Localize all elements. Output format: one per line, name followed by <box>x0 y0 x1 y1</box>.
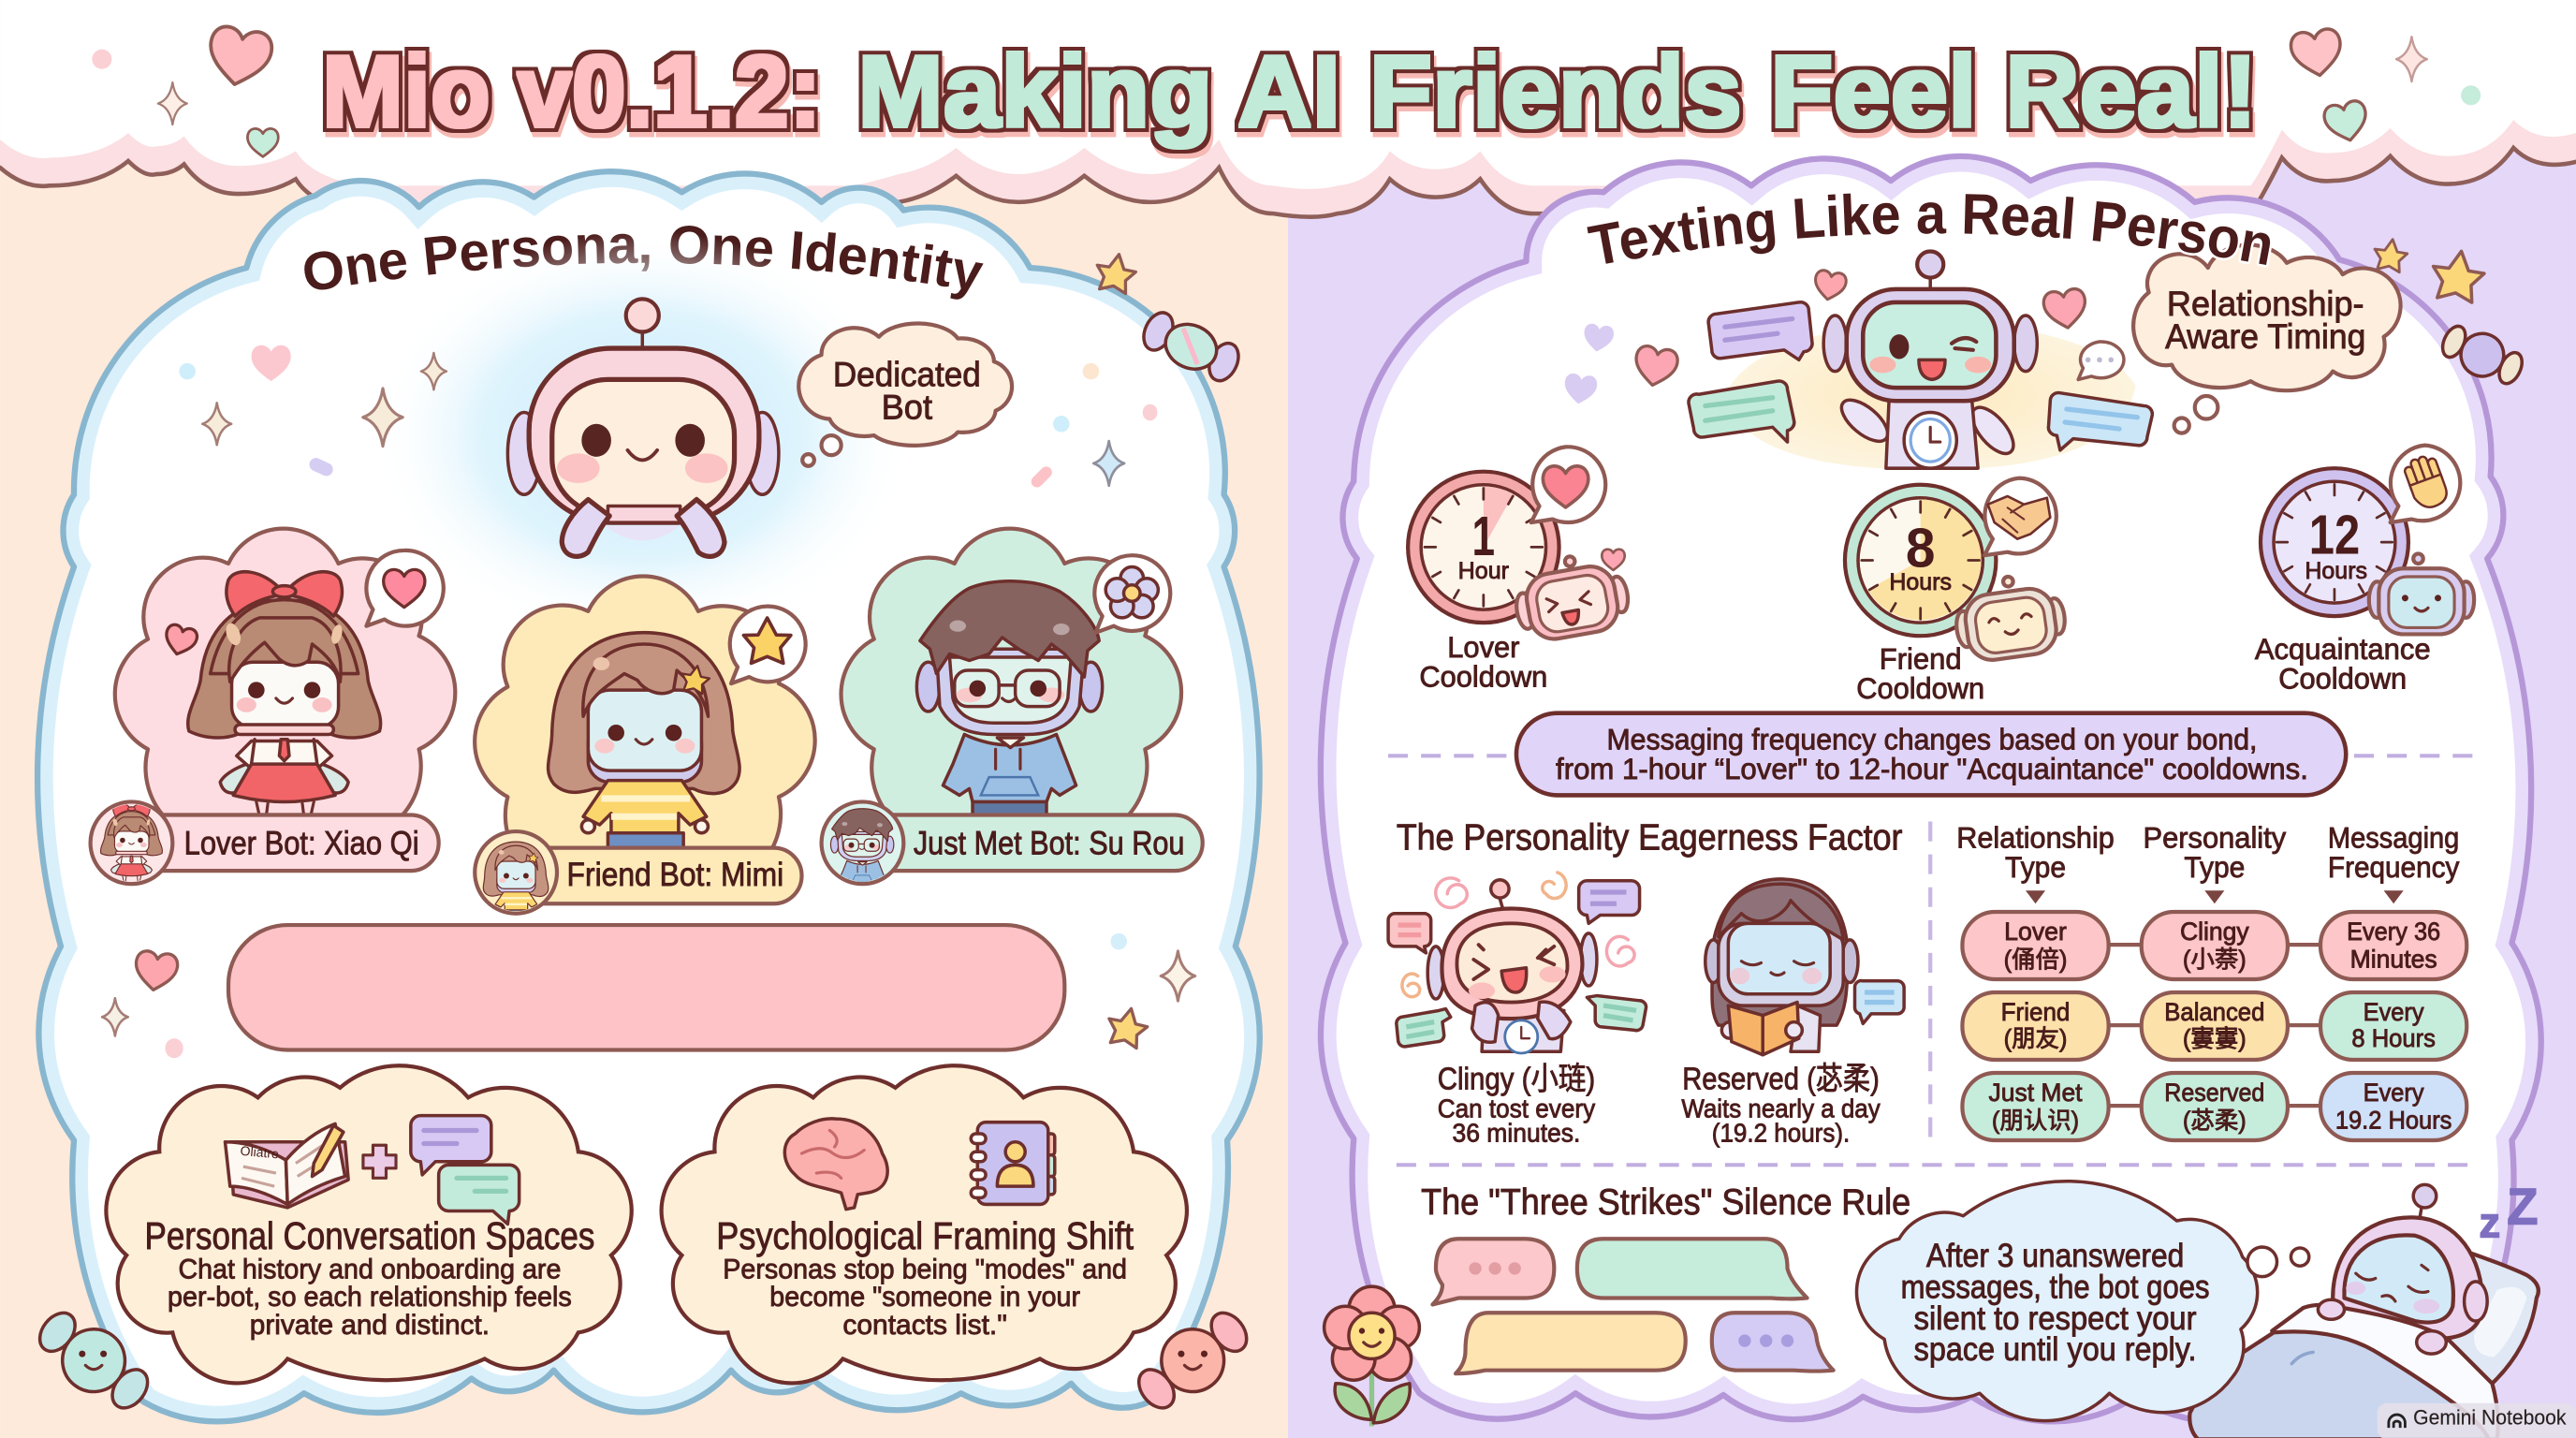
heading and body: Personal Conversation Spaces <box>145 1214 594 1257</box>
table row: friend: Friend <box>2001 997 2070 1026</box>
clock: friend cooldown <box>1845 478 2069 705</box>
heading: texting like a real person: Texting Like a Real Person <box>1587 193 2272 268</box>
character: Xiao Qi <box>188 572 381 816</box>
panel: psychological framing shift <box>662 1065 1187 1383</box>
icon: clingy chat bubbles and swirls <box>1388 873 1647 1047</box>
icon: flower speech bubble <box>1094 555 1170 633</box>
heading: one persona: One Persona, One Identity <box>304 226 984 300</box>
top scalloped pink band <box>0 0 2576 217</box>
table row: lover: Lover <box>2004 917 2067 946</box>
table row: friend: (寠寠) <box>2183 1026 2247 1052</box>
yellow glow behind texting bot <box>1725 320 2136 470</box>
table row: lover <box>1962 912 2466 979</box>
label: friend cooldown: Cooldown <box>1856 671 1984 705</box>
icon: lover mini bot <box>1509 548 1632 645</box>
label: just met bot <box>822 801 1203 888</box>
callout: three strikes explanation: space until you reply. <box>1914 1331 2197 1368</box>
table row: lover: Minutes <box>2350 945 2437 974</box>
text: reserved description: Waits nearly a day <box>1681 1093 1881 1123</box>
table row: friend <box>1962 992 2466 1060</box>
label: acquaintance cooldown: Acquaintance <box>2255 632 2431 666</box>
table row: friend: (朋友) <box>2004 1026 2067 1052</box>
table row: just met: Reserved <box>2164 1078 2264 1107</box>
text: clingy description: Can tost every <box>1438 1093 1595 1123</box>
icon: reserved chat bubble <box>1854 981 1904 1023</box>
character: Mimi <box>549 633 739 848</box>
watermark: Gemini Notebook <box>2378 1403 2576 1438</box>
callout: relationship-aware timing: Aware Timing <box>2165 317 2365 356</box>
candy: right panel <box>2436 318 2528 391</box>
title: Mio v0.1.2: <box>322 35 822 149</box>
icon: handshake bubble <box>1984 478 2056 555</box>
icon: acquaintance mini bot <box>2369 553 2474 634</box>
table: column headers: Relationship <box>1956 821 2115 855</box>
label: acquaintance cooldown <box>2255 632 2431 695</box>
table row: lover: (俑倍) <box>2004 947 2067 974</box>
table row: friend: Every <box>2364 997 2424 1026</box>
banner: messaging frequency: from 1-hour “Lover" to 12-hour "Acquaintance" cooldowns. <box>1556 752 2308 785</box>
banner: messaging frequency <box>1516 713 2346 795</box>
label: lover cooldown <box>1419 630 1547 694</box>
table row: just met: (朋认识) <box>1992 1108 2079 1135</box>
heading and body: Chat history and onboarding are <box>178 1254 561 1284</box>
icon: contacts notebook <box>971 1123 1055 1204</box>
callout: relationship-aware timing: Relationship- <box>2167 285 2364 323</box>
label: lover cooldown: Cooldown <box>1419 660 1547 694</box>
label: lover cooldown: Lover <box>1447 630 1519 664</box>
icon: reserved girl reading <box>1705 879 1858 1055</box>
table row: just met: Just Met <box>1989 1078 2083 1107</box>
table: column headers: Messaging <box>2328 821 2459 855</box>
table row: friend: 8 Hours <box>2351 1023 2436 1052</box>
clock: lover cooldown <box>1408 447 1632 694</box>
clock: acquaintance cooldown: 12 <box>2309 503 2360 565</box>
heading and body <box>716 1214 1134 1341</box>
table row: lover: Every 36 <box>2347 917 2440 946</box>
dashed dividers beside banner <box>1388 756 2476 1165</box>
table row: lover: (小萘) <box>2183 947 2247 974</box>
background: peach left half <box>0 0 1288 1438</box>
icon: message bubbles around bot <box>1689 302 2152 450</box>
clock: lover cooldown: Hour <box>1458 559 1509 584</box>
title: Making AI Friends Feel Real! <box>857 35 2257 149</box>
card: friend bot Mimi <box>475 577 815 915</box>
callout: relationship-aware timing <box>2133 245 2401 433</box>
icon: texting bot <box>1823 252 2037 468</box>
table row: just met <box>1962 1073 2466 1140</box>
icon: mint message bubble <box>439 1165 520 1224</box>
decorations: hearts and stars <box>1562 237 2487 406</box>
heading and body: become "someone in your <box>769 1282 1080 1313</box>
candy: bottom right <box>1126 1299 1260 1422</box>
candy: bottom left <box>26 1299 161 1422</box>
callout: three strikes explanation: After 3 unanswered <box>1926 1238 2184 1274</box>
banner: messaging frequency: Messaging frequency changes based on your bond, <box>1606 722 2257 756</box>
text: clingy description: Clingy (小琏) <box>1438 1063 1595 1097</box>
icon: open book and pencil: Oliatre <box>240 1143 280 1161</box>
callout: dedicated bot <box>798 323 1012 466</box>
table: connectors <box>2110 945 2320 1106</box>
label: friend cooldown <box>1856 641 1984 705</box>
icon: open book and pencil <box>225 1123 348 1208</box>
heading and body: private and distinct. <box>250 1310 490 1341</box>
watermark: Gemini Notebook: Gemini Notebook <box>2413 1406 2566 1430</box>
label: lover bot <box>91 801 439 884</box>
table row: lover: Clingy <box>2180 917 2249 946</box>
heading: three strikes silence rule: The "Three Strikes" Silence Rule <box>1421 1182 1910 1223</box>
icon: purple message bubble <box>411 1116 491 1175</box>
text: clingy description: 36 minutes. <box>1453 1119 1580 1148</box>
table row: friend: Balanced <box>2164 997 2264 1026</box>
icon: heart bubble <box>1531 447 1605 522</box>
icon: sleeping bot in bed <box>2189 1184 2539 1438</box>
label: friend cooldown: Friend <box>1880 641 1962 675</box>
clock: friend cooldown: 8 <box>1906 516 1935 579</box>
table row: just met: (苾柔) <box>2183 1108 2247 1135</box>
panel: one persona, one identity <box>34 169 1263 1425</box>
icon: waving hand bubble <box>2391 446 2460 522</box>
card: just met bot Su Rou <box>822 529 1203 888</box>
heading and body: Personas stop being "modes" and <box>723 1254 1127 1284</box>
table: column headers <box>1956 821 2460 903</box>
panel: texting like a real person <box>1318 154 2544 1438</box>
label: lover bot: Lover Bot: Xiao Qi <box>184 826 419 862</box>
callout: three strikes explanation <box>1856 1181 2309 1421</box>
text: clingy description <box>1438 1063 1595 1148</box>
card: lover bot Xiao Qi <box>91 529 455 884</box>
callout: dedicated bot: Bot <box>882 389 932 427</box>
text: reserved description: Reserved (苾柔) <box>1682 1063 1880 1097</box>
table: column headers: Personality <box>2143 821 2286 855</box>
panel: personal conversation spaces <box>106 1065 632 1383</box>
heading: personality eagerness factor: The Personality Eagerness Factor <box>1397 817 1903 858</box>
clock: acquaintance cooldown: Hours <box>2305 559 2367 584</box>
heading and body <box>145 1214 594 1341</box>
callout: three strikes explanation: silent to respect your <box>1914 1300 2197 1337</box>
icon: star speech bubble <box>730 607 806 683</box>
icon: central dedicated bot <box>507 299 779 556</box>
decorations: sparkles, hearts, confetti <box>102 251 1195 1058</box>
heading and body: contacts list." <box>842 1310 1007 1341</box>
heading and body: per-bot, so each relationship feels <box>168 1282 572 1313</box>
icon: plus <box>363 1145 396 1178</box>
clock: friend cooldown: Hours <box>1889 570 1952 595</box>
candy: top right <box>1137 306 1245 387</box>
icon: clingy bot <box>1427 880 1597 1053</box>
icon: zzz: z <box>2479 1199 2500 1247</box>
icon: heart speech bubble <box>366 550 444 626</box>
heading and body: Psychological Framing Shift <box>716 1214 1134 1257</box>
clock: lover cooldown: 1 <box>1472 505 1495 567</box>
icon: brain <box>784 1119 887 1210</box>
table row: just met: 19.2 Hours <box>2335 1106 2452 1135</box>
table: column headers: Type <box>2005 850 2066 884</box>
label: friend bot <box>475 831 802 915</box>
icon: flower <box>1325 1286 1419 1426</box>
character: Su Rou <box>916 581 1103 814</box>
label: friend bot: Friend Bot: Mimi <box>567 857 783 893</box>
callout: three strikes explanation: messages, the bot goes <box>1901 1269 2210 1305</box>
label: acquaintance cooldown: Cooldown <box>2278 661 2407 695</box>
icon: zzz: Z <box>2507 1178 2538 1235</box>
top white header area <box>0 0 2576 189</box>
icon: zzz <box>2479 1178 2538 1247</box>
glow behind bot <box>372 230 914 640</box>
background: lavender right half <box>1288 0 2576 1438</box>
table row: just met: Every <box>2364 1078 2424 1107</box>
header decorations <box>92 24 2481 156</box>
icon: friend mini bot <box>1951 569 2069 665</box>
clock: acquaintance cooldown <box>2255 446 2474 695</box>
label: just met bot: Just Met Bot: Su Rou <box>914 826 1184 862</box>
callout: dedicated bot: Dedicated <box>833 355 981 393</box>
table: column headers: Type <box>2184 850 2245 884</box>
empty pink banner <box>228 925 1064 1049</box>
text: reserved description <box>1681 1063 1881 1148</box>
unanswered message bubbles <box>1432 1239 1834 1373</box>
table: column headers: Frequency <box>2328 850 2460 884</box>
icon: small heart <box>162 623 198 658</box>
text: reserved description: (19.2 hours). <box>1712 1119 1850 1148</box>
